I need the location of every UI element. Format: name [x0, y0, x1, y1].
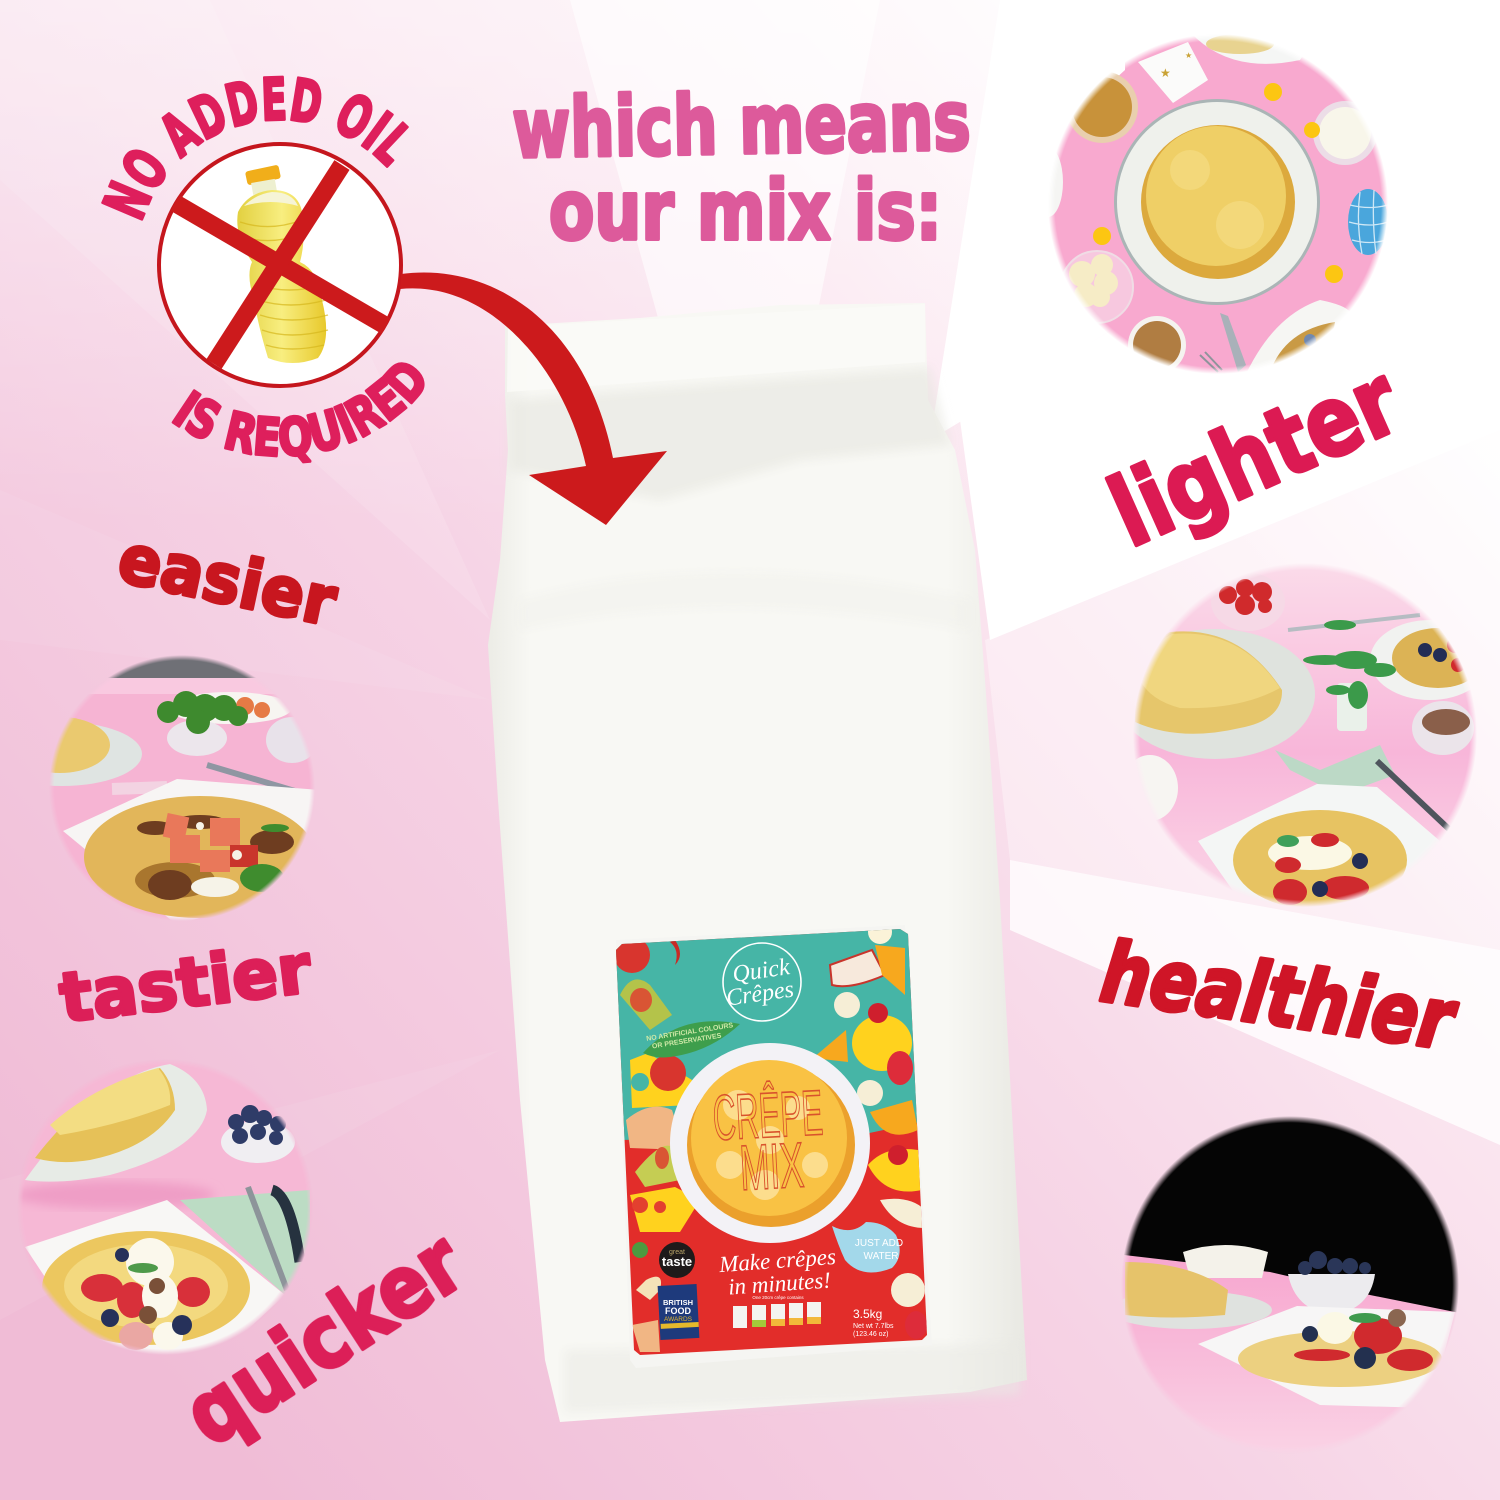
plate with crepe	[670, 1043, 870, 1243]
badge top text: NO ADDED OIL	[101, 76, 409, 221]
great taste badge	[659, 1242, 695, 1278]
right plate with crepe	[1371, 620, 1470, 700]
heading: which means our mix is	[512, 74, 971, 259]
title: crepe mix: CRÊPE	[711, 1076, 825, 1154]
pack weight: Net wt 7.7lbs	[853, 1323, 894, 1330]
label: tastier: tastier	[55, 930, 316, 1039]
blueberry bowl	[1288, 1274, 1375, 1315]
just add water splash	[832, 1222, 903, 1272]
nutrition table: One 20cm crêpe contains	[752, 1295, 804, 1300]
photo: savoury crepe	[50, 656, 314, 920]
crepe mix bag	[488, 303, 1027, 1422]
label: easier: easier	[111, 519, 343, 642]
nut bowl	[1128, 316, 1186, 368]
napkin and cutlery	[1275, 745, 1394, 786]
slogan	[720, 1250, 835, 1294]
photo: crepes on round plate: ★	[1185, 51, 1192, 60]
strawberry bowl	[1217, 616, 1278, 631]
pack weight	[853, 1310, 894, 1338]
chocolate bowl	[1412, 701, 1474, 755]
blue patterned bowl	[1348, 189, 1388, 255]
logo: Quick Crepes: Crêpes	[725, 976, 796, 1012]
label: lighter: lighter	[1094, 344, 1416, 569]
leaf: no artificial colours or preservatives: OR PRESERVATIVES	[652, 1033, 722, 1050]
pack weight: 3.5kg	[853, 1307, 882, 1321]
just add water splash: JUST ADD	[855, 1238, 903, 1249]
product label	[616, 929, 927, 1355]
great taste badge: taste	[662, 1254, 692, 1269]
bag fold creases	[510, 368, 1020, 1412]
photo: crepes on round plate: ★	[1160, 66, 1171, 80]
mint in glass	[1337, 683, 1367, 731]
label background	[616, 929, 927, 1355]
leaf: no artificial colours or preservatives: NO ARTIFICIAL COLOURS	[646, 1022, 734, 1043]
photo: crepes with strawberries and mint	[1134, 565, 1476, 906]
prohibited circle	[159, 144, 401, 386]
left plate with crepes	[1123, 1293, 1272, 1329]
knife and fork	[1220, 313, 1246, 372]
cream bowl	[1183, 1245, 1268, 1278]
banana bowl	[1061, 251, 1133, 323]
red arrow	[400, 272, 667, 525]
red cross	[175, 165, 386, 364]
british food awards badge: AWARDS	[664, 1316, 693, 1323]
logo: Quick Crepes	[723, 943, 801, 1021]
heading: which means our mix is: which means	[512, 74, 971, 177]
just add water splash: WATER	[864, 1251, 898, 1262]
slogan: Make crêpes	[717, 1244, 837, 1277]
british food awards badge	[658, 1284, 699, 1340]
badge bottom text: IS REQUIRED	[172, 362, 425, 464]
label: quicker: quicker	[167, 1213, 482, 1466]
slogan: in minutes!	[727, 1267, 832, 1300]
card with stars	[1138, 42, 1208, 103]
heading: which means our mix is: our mix is:	[549, 164, 942, 259]
no added oil badge	[101, 76, 425, 464]
honey bowl	[1066, 71, 1138, 143]
great taste badge: great	[669, 1249, 685, 1256]
nutrition table	[733, 1295, 821, 1328]
cream bowl	[1313, 101, 1377, 165]
british food awards badge: FOOD	[665, 1306, 691, 1316]
top plate	[1195, 35, 1302, 64]
cream glass bowl	[1136, 755, 1178, 820]
leaf: no artificial colours or preservatives	[643, 1021, 740, 1058]
photo: crepe on dark background	[1122, 1116, 1459, 1440]
left plate with crepes	[50, 724, 142, 786]
title: crepe mix	[714, 1080, 823, 1191]
photo: sweet crepe with blueberries	[15, 1055, 315, 1360]
main plate	[1114, 99, 1320, 305]
white plate	[1198, 784, 1439, 902]
plate of crepes	[1115, 629, 1315, 759]
big plate	[1198, 1306, 1455, 1408]
pack weight: (123.46 oz)	[853, 1331, 888, 1338]
icon: oil bottle	[237, 165, 328, 363]
title: crepe mix: MIX	[738, 1129, 806, 1204]
lower right plate	[1248, 300, 1349, 370]
british food awards badge: BRITISH	[663, 1298, 693, 1307]
logo: Quick Crepes: Quick	[731, 954, 792, 988]
fruit illustrations	[616, 942, 650, 973]
photo: crepes on round plate	[1049, 35, 1388, 374]
